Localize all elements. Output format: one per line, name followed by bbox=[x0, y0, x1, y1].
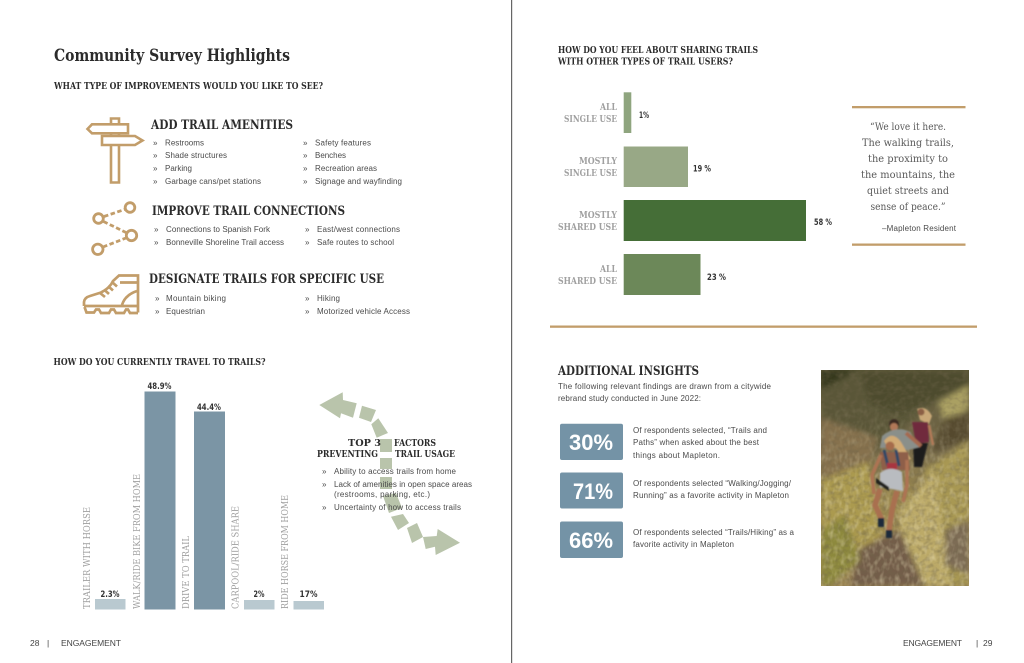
list: amenities: Recreation areas bbox=[315, 164, 377, 173]
bar: ride horse from home bbox=[280, 495, 324, 610]
list: specific use: » bbox=[305, 307, 310, 316]
list: factors: (restrooms, parking, etc.) bbox=[334, 490, 430, 499]
stat: 30%: 30% bbox=[569, 430, 613, 455]
list: amenities: Shade structures bbox=[165, 151, 227, 160]
bar: mostly single use: MOSTLY bbox=[579, 157, 617, 167]
footer: left page: 28 bbox=[30, 638, 40, 648]
bar: walk or ride bike from home: 48.9% bbox=[148, 382, 172, 392]
heading: top 3 factors: TRAIL USAGE bbox=[395, 450, 455, 460]
list: amenities: » bbox=[303, 151, 308, 160]
heading: sharing trails question bbox=[557, 46, 758, 68]
bar: ride horse from home: 17% bbox=[300, 590, 318, 600]
list: specific use: » bbox=[155, 307, 160, 316]
heading: top 3 factors: TOP 3 bbox=[348, 439, 381, 449]
title: Community Survey Highlights bbox=[54, 46, 290, 66]
bar: drive to trail: 44.4% bbox=[197, 403, 221, 413]
text block: insights intro bbox=[558, 382, 772, 403]
footer: right page: ENGAGEMENT bbox=[903, 638, 962, 648]
footer: left page: | bbox=[47, 638, 49, 648]
list: connections: » bbox=[154, 225, 159, 234]
callout: resident quote: “We love it here. bbox=[870, 121, 946, 133]
callout: resident quote: The walking trails, bbox=[862, 137, 954, 149]
list: amenities bbox=[153, 138, 402, 186]
callout: resident quote: –Mapleton Resident bbox=[882, 224, 957, 233]
callout: resident quote bbox=[852, 106, 966, 246]
heading: designate trails: DESIGNATE TRAILS FOR SPECIFIC USE bbox=[149, 272, 384, 287]
panel: improve trail connections bbox=[152, 204, 400, 247]
bar chart: sharing trails bbox=[558, 92, 832, 295]
list: factors: Uncertainty of how to access trails bbox=[334, 503, 461, 512]
icon: hiking boot bbox=[84, 276, 138, 313]
footer: left page bbox=[30, 638, 121, 648]
list: specific use: Hiking bbox=[317, 294, 340, 303]
arrow: double-headed dashed curve bbox=[319, 392, 460, 555]
text block: insights intro: rebrand study conducted in June 2022: bbox=[558, 394, 701, 403]
callout: resident quote: the mountains, the bbox=[861, 169, 955, 181]
list: factors: Ability to access trails from home bbox=[334, 467, 457, 476]
stat: 71%: Of respondents selected “Walking/Jogging/ bbox=[633, 479, 792, 488]
heading: improvements question: WHAT TYPE OF IMPROVEMENTS WOULD YOU LIKE TO SEE? bbox=[53, 82, 323, 92]
list: amenities: Benches bbox=[315, 151, 346, 160]
stat: 66%: 66% bbox=[569, 528, 613, 553]
middle hiker bbox=[888, 418, 900, 426]
bar: walk or ride bike from home bbox=[132, 382, 176, 610]
icon: connections bbox=[93, 203, 137, 254]
bar: mostly single use: 19 % bbox=[693, 164, 711, 174]
bar: all single use bbox=[564, 92, 649, 133]
list: specific use: Mountain biking bbox=[166, 294, 226, 303]
list: amenities: Garbage cans/pet stations bbox=[165, 177, 261, 186]
bar: drive to trail: DRIVE TO TRAIL bbox=[181, 535, 192, 609]
bar: mostly shared use bbox=[558, 200, 832, 241]
list: amenities: » bbox=[303, 177, 308, 186]
callout: resident quote: quiet streets and bbox=[867, 185, 949, 197]
heading: top 3 factors: PREVENTING bbox=[317, 450, 378, 460]
stat: 71% bbox=[560, 472, 792, 508]
footer: right page: 29 bbox=[983, 638, 993, 648]
stat: 66% bbox=[560, 522, 795, 558]
bar: all shared use bbox=[558, 254, 726, 295]
list: amenities: Signage and wayfinding bbox=[315, 177, 402, 186]
bar: all single use: ALL bbox=[599, 103, 618, 113]
bar: carpool or ride share: CARPOOL/RIDE SHARE bbox=[230, 506, 242, 609]
icon: signpost bbox=[88, 118, 142, 182]
list: specific use bbox=[155, 294, 410, 316]
list: connections: Bonneville Shoreline Trail access bbox=[166, 238, 284, 247]
photo: hikers on a trail bbox=[821, 370, 969, 586]
list: connections: Connections to Spanish Fork bbox=[166, 225, 271, 234]
list: amenities: Parking bbox=[165, 164, 192, 173]
list: factors: » bbox=[322, 480, 327, 489]
bar: mostly single use bbox=[564, 146, 711, 187]
list: specific use: Motorized vehicle Access bbox=[317, 307, 410, 316]
list: amenities: » bbox=[153, 177, 158, 186]
list: amenities: Restrooms bbox=[165, 138, 204, 148]
list: connections bbox=[154, 225, 400, 247]
list: specific use: Equestrian bbox=[166, 307, 205, 316]
heading: add trail amenities: ADD TRAIL AMENITIES bbox=[150, 118, 293, 133]
callout: resident quote: sense of peace.” bbox=[870, 201, 946, 213]
bar: mostly shared use: SHARED USE bbox=[558, 223, 617, 233]
list: amenities: » bbox=[303, 164, 308, 173]
bar: trailer with horse: TRAILER WITH HORSE bbox=[82, 507, 93, 609]
list: specific use: » bbox=[155, 294, 160, 303]
heading: sharing trails question: HOW DO YOU FEEL ABOUT SHARING TRAILS bbox=[558, 46, 758, 56]
bar: all shared use: ALL bbox=[599, 265, 618, 275]
bar: walk or ride bike from home: WALK/RIDE BIKE FROM HOME bbox=[132, 474, 143, 609]
stat: 66%: Of respondents selected “Trails/Hiking” as a bbox=[633, 528, 795, 537]
heading: additional insights: ADDITIONAL INSIGHTS bbox=[557, 364, 699, 379]
list: connections: » bbox=[305, 225, 310, 234]
list: amenities: » bbox=[153, 138, 158, 148]
bar chart: travel to trails bbox=[82, 382, 324, 610]
bar: all shared use: SHARED USE bbox=[558, 277, 617, 287]
bar: ride horse from home: RIDE HORSE FROM HOME bbox=[280, 495, 291, 609]
front hiker bbox=[884, 436, 911, 462]
bar: carpool or ride share bbox=[230, 506, 274, 610]
panel: designate trails bbox=[149, 272, 410, 316]
text block: insights intro: The following relevant findings are drawn from a citywide bbox=[558, 382, 772, 391]
list: connections: Safe routes to school bbox=[317, 238, 394, 247]
list: connections: » bbox=[154, 238, 159, 247]
list: factors bbox=[322, 467, 472, 512]
list: amenities: Safety features bbox=[315, 138, 371, 148]
panel: add trail amenities bbox=[150, 118, 402, 186]
bar: carpool or ride share: 2% bbox=[254, 590, 265, 600]
list: connections: » bbox=[305, 238, 310, 247]
bar: mostly single use: SINGLE USE bbox=[564, 169, 617, 179]
bar: all shared use: 23 % bbox=[707, 273, 726, 283]
bar: trailer with horse bbox=[82, 507, 126, 610]
heading: sharing trails question: WITH OTHER TYPES OF TRAIL USERS? bbox=[557, 58, 733, 68]
heading: top 3 factors: FACTORS bbox=[394, 439, 436, 449]
stat: 30% bbox=[560, 424, 767, 460]
list: factors: » bbox=[322, 467, 327, 476]
stat: 30%: Of respondents selected, “Trails and bbox=[633, 426, 767, 435]
list: amenities: » bbox=[153, 151, 158, 160]
footer: right page bbox=[903, 638, 993, 648]
footer: left page: ENGAGEMENT bbox=[61, 638, 121, 648]
bar: mostly shared use: MOSTLY bbox=[579, 211, 617, 221]
list: factors: Lack of amenities in open space areas bbox=[334, 480, 472, 489]
bar: trailer with horse: 2.3% bbox=[100, 590, 120, 600]
list: amenities: » bbox=[303, 138, 308, 148]
stat: 30%: Paths” when asked about the best bbox=[633, 438, 760, 447]
bar: mostly shared use: 58 % bbox=[814, 218, 832, 228]
list: factors: » bbox=[322, 503, 327, 512]
list: specific use: » bbox=[305, 294, 310, 303]
bar: all single use: 1% bbox=[639, 111, 649, 121]
footer: right page: | bbox=[976, 638, 978, 648]
back hiker bbox=[917, 408, 932, 424]
stat: 71%: 71% bbox=[573, 479, 613, 504]
heading: travel question: HOW DO YOU CURRENTLY TRAVEL TO TRAILS? bbox=[54, 358, 266, 368]
list: connections: East/west connections bbox=[317, 225, 400, 234]
list: amenities: » bbox=[153, 164, 158, 173]
heading: improve trail connections: IMPROVE TRAIL CONNECTIONS bbox=[152, 204, 345, 219]
stat: 71%: Running” as a favorite activity in Mapleton bbox=[633, 491, 789, 500]
bar: drive to trail bbox=[181, 403, 225, 610]
heading: top 3 factors bbox=[317, 439, 455, 460]
stat: 66%: favorite activity in Mapleton bbox=[633, 540, 734, 549]
bar: all single use: SINGLE USE bbox=[564, 115, 617, 125]
callout: resident quote: the proximity to bbox=[868, 153, 948, 165]
stat: 30%: things about Mapleton. bbox=[633, 451, 720, 460]
panel: top 3 factors preventing trail usage bbox=[317, 439, 472, 512]
